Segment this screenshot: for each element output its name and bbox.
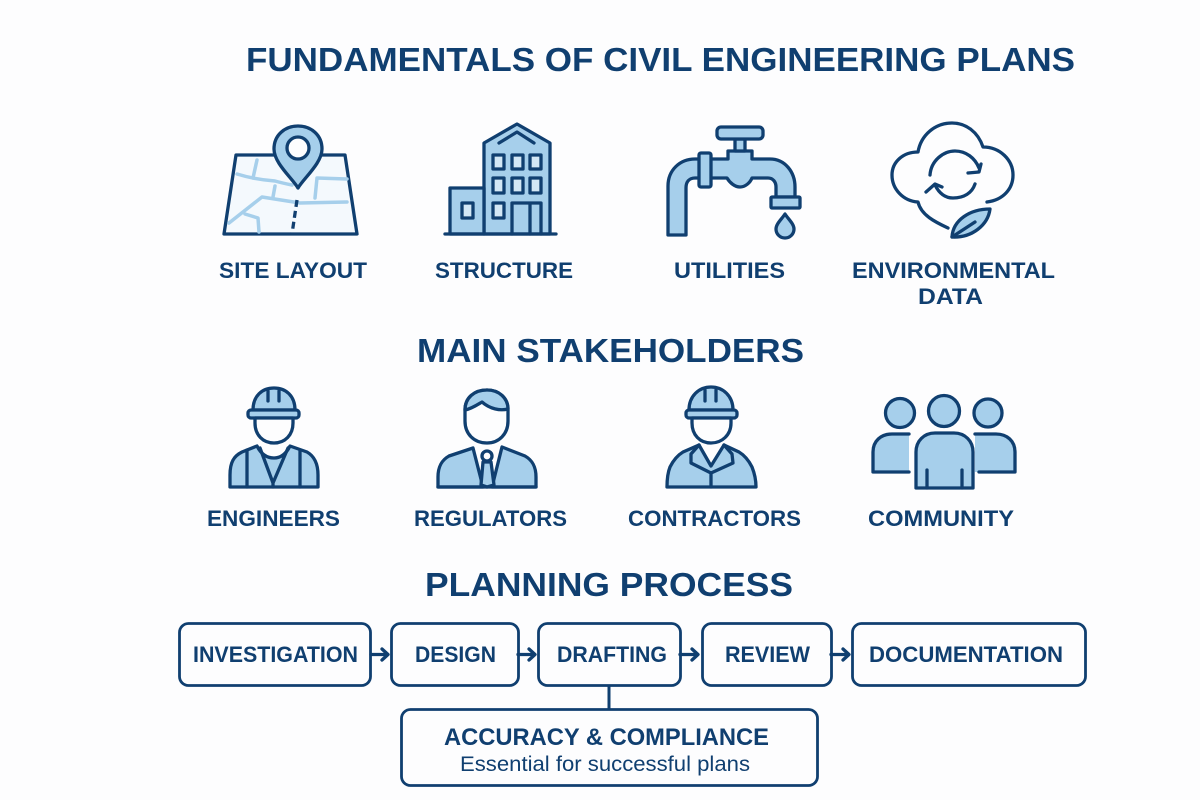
label: contractors: CONTRACTORS: [628, 506, 801, 531]
label: environmental data: DATA: [918, 284, 983, 309]
icon: water faucet: [668, 127, 800, 238]
process step: investigation: [180, 624, 370, 686]
label: environmental data: ENVIRONMENTAL: [852, 258, 1055, 283]
label: utilities: UTILITIES: [674, 258, 785, 283]
icon: engineer: [230, 388, 318, 487]
heading: main stakeholders: MAIN STAKEHOLDERS: [417, 332, 804, 369]
process step: design: [392, 624, 518, 686]
label: regulators: REGULATORS: [414, 506, 567, 531]
process step: design: DESIGN: [415, 642, 496, 667]
icon: community group: [873, 396, 1015, 488]
label: environmental data: [852, 258, 1055, 309]
label: structure: STRUCTURE: [435, 258, 573, 283]
icon: contractor: [667, 387, 756, 487]
callout: accuracy and compliance: [402, 710, 818, 786]
heading: planning process: PLANNING PROCESS: [425, 566, 793, 603]
arrow: review to documentation: [831, 649, 849, 660]
arrow: drafting to review: [680, 649, 698, 660]
label: community: COMMUNITY: [868, 506, 1014, 531]
process step: documentation: [852, 624, 1086, 686]
icon: building structure: [445, 124, 556, 234]
arrow: design to drafting: [518, 649, 535, 660]
callout: accuracy and compliance: ACCURACY & COMPLIANCE: [444, 724, 769, 751]
callout: accuracy and compliance: Essential for successful plans: [460, 753, 750, 776]
arrow: investigation to design: [371, 649, 388, 660]
connector: drafting to accuracy: [608, 685, 610, 709]
label: site layout: SITE LAYOUT: [219, 258, 368, 283]
icon: regulator: [438, 390, 536, 487]
process step: review: REVIEW: [725, 642, 810, 667]
icon: environmental cloud with recycle arrows and leaf: [892, 123, 1013, 237]
process step: review: [702, 624, 832, 686]
label: engineers: ENGINEERS: [207, 506, 340, 531]
title: FUNDAMENTALS OF CIVIL ENGINEERING PLANS: [246, 41, 1075, 78]
process step: documentation: DOCUMENTATION: [869, 642, 1063, 667]
icon: site layout map: [224, 126, 357, 234]
process step: drafting: DRAFTING: [557, 642, 667, 667]
process step: investigation: INVESTIGATION: [193, 642, 358, 667]
process step: drafting: [538, 624, 680, 686]
